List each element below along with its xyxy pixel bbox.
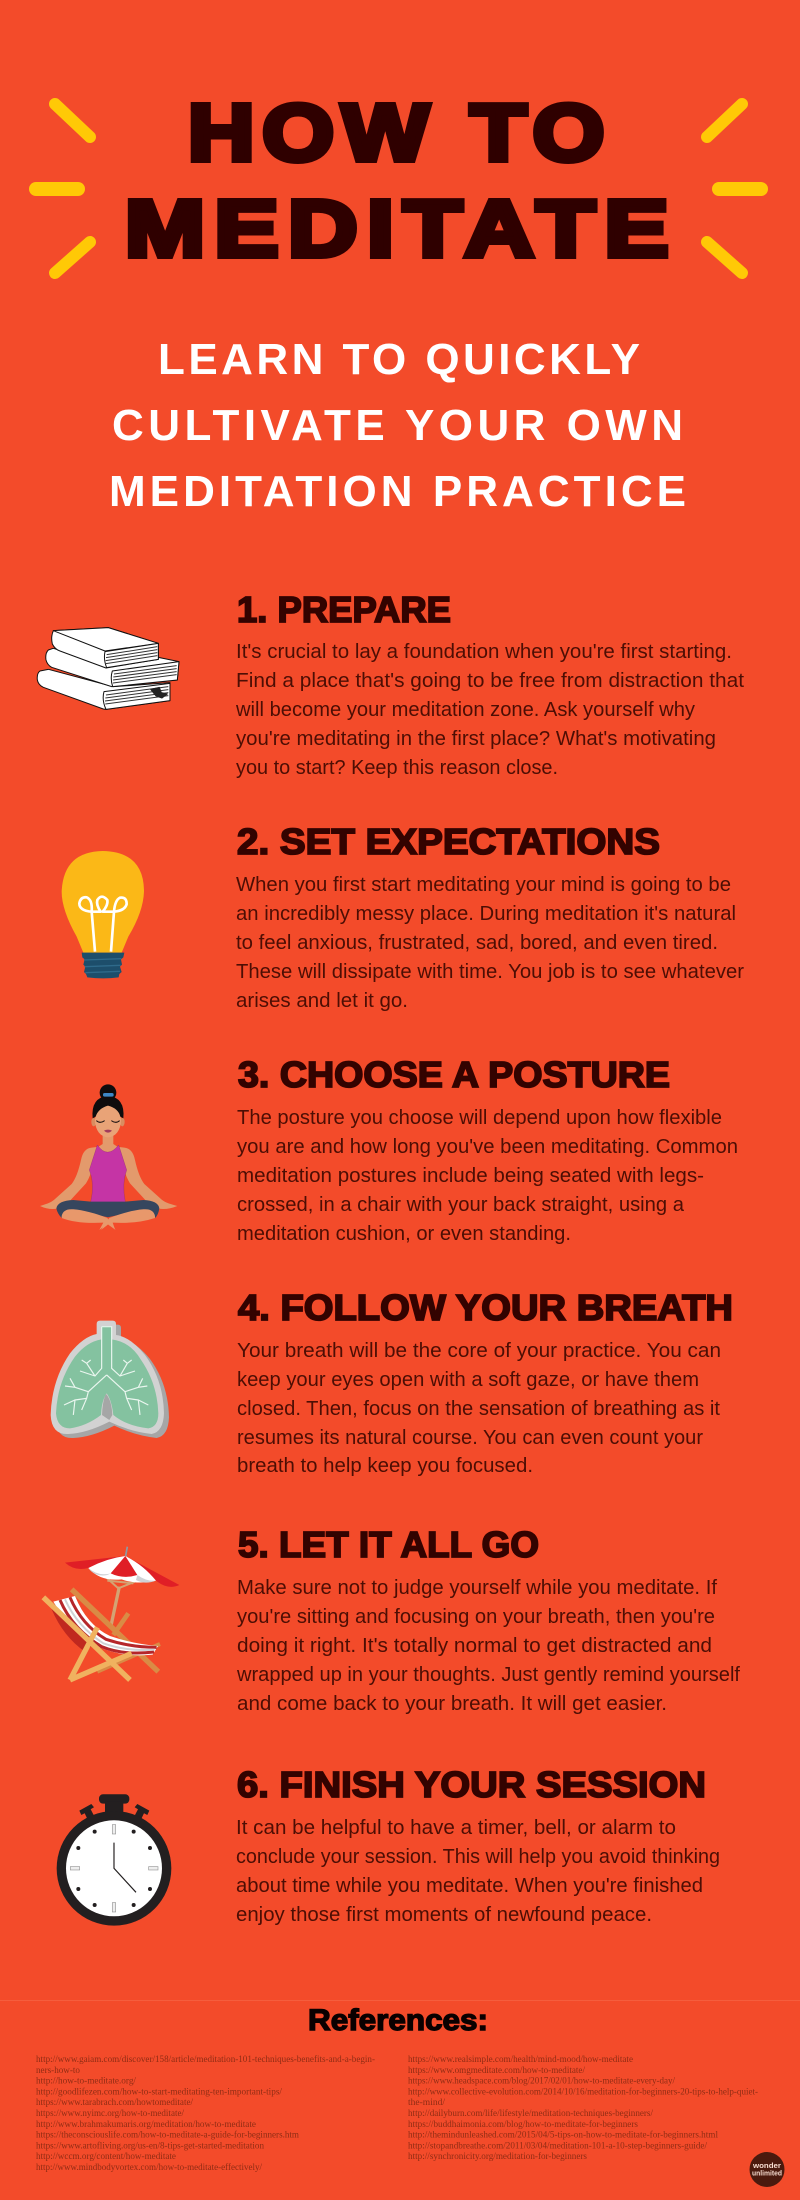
references: left column: https://www.artofliving.org/us-en/8-tips-get-started-meditation — [36, 2140, 264, 2150]
references: left column: http://how-to-meditate.org/ — [36, 2076, 137, 2086]
text block: you're sitting and focusing on your breath, then you're — [237, 1606, 715, 1628]
references: right column: https://www.realsimple.com/health/mind-mood/how-meditate — [408, 2054, 633, 2064]
text block: keep your eyes open with a soft gaze, or have them — [237, 1369, 699, 1391]
heading: 3. CHOOSE A POSTURE — [238, 1054, 670, 1095]
references: right column: http://synchronicity.org/meditation-for-beginners — [408, 2151, 587, 2161]
logo badge — [750, 2152, 784, 2187]
references: left column: http://goodlifezen.com/how-to-start-meditating-ten-important-tips/ — [36, 2086, 283, 2096]
references: left column: http://www.brahmakumaris.org/meditation/how-to-meditate — [36, 2119, 256, 2129]
references: right column: http://stopandbreathe.com/2011/03/04/meditation-101-a-10-step-beginners-guide/ — [408, 2140, 707, 2150]
references: right column: https://www.headspace.com/blog/2017/02/01/how-to-meditate-every-day/ — [408, 2076, 675, 2086]
references: right column: http://www.collective-evolution.com/2014/10/16/meditation-for-beginners-20-tips-to-help-quiet- — [408, 2086, 758, 2096]
subtitle: LEARN TO QUICKLY — [158, 335, 640, 384]
text block — [237, 1107, 738, 1245]
text block: crossed, in a chair with your back straight, using a — [237, 1194, 685, 1216]
heading: 6. FINISH YOUR SESSION — [237, 1764, 706, 1805]
text block: These will dissipate with time. You job is to see whatever — [236, 961, 744, 983]
references: left column: http://www.mindbodyvortex.com/how-to-meditate-effectively/ — [36, 2162, 262, 2172]
text block: meditation cushion, or even standing. — [237, 1223, 571, 1245]
text block: to feel anxious, frustrated, sad, bored, and even tired. — [236, 932, 718, 954]
icon: light bulb — [62, 851, 144, 978]
text block: you to start? Keep this reason close. — [236, 757, 558, 779]
text block — [235, 641, 744, 779]
icon: stack of books — [37, 628, 179, 709]
title — [125, 89, 669, 273]
references: left column: ners-how-to — [36, 2065, 80, 2075]
panel: step 1 prepare — [37, 589, 744, 779]
logo badge: unlimited — [752, 2170, 782, 2178]
subtitle: MEDITATION PRACTICE — [109, 467, 686, 516]
text block: meditation postures include being seated with legs- — [237, 1165, 704, 1187]
text block: enjoy those first moments of newfound peace. — [236, 1904, 652, 1926]
logo badge: wonder — [752, 2163, 781, 2170]
icon: lungs — [51, 1321, 169, 1438]
references: right column: http://dailyburn.com/life/lifestyle/meditation-techniques-beginners/ — [408, 2108, 653, 2118]
references: right column: the-mind/ — [408, 2097, 446, 2107]
panel: step 4 follow your breath — [51, 1287, 733, 1477]
text block: you're meditating in the first place? What's motivating — [236, 728, 716, 750]
text block: you are and how long you've been meditating. Common — [237, 1136, 738, 1158]
icon: meditating woman — [40, 1084, 177, 1230]
icon: stopwatch — [57, 1794, 171, 1926]
title: HOW TO — [188, 89, 604, 178]
text block: doing it right. It's totally normal to get distracted and — [237, 1635, 712, 1657]
references: left column: http://wccm.org/content/how-meditate — [36, 2151, 176, 2161]
references: right column: https://buddhaimonia.com/blog/how-to-meditate-for-beginners — [408, 2119, 638, 2129]
panel: step 5 let it all go — [43, 1524, 740, 1715]
text block: conclude your session. This will help you avoid thinking — [236, 1846, 720, 1868]
heading: 5. LET IT ALL GO — [238, 1524, 539, 1565]
references: right column: http://themindunleashed.com/2015/04/5-tips-on-how-to-meditate-for-beginners.html — [408, 2130, 718, 2140]
references: left column: https://www.tarabrach.com/howtomeditate/ — [36, 2097, 194, 2107]
text block: Make sure not to judge yourself while you meditate. If — [237, 1577, 717, 1599]
text block: arises and let it go. — [236, 990, 408, 1012]
references: left column: https://www.nyimc.org/how-to-meditate/ — [36, 2108, 184, 2118]
text block: and come back to your breath. It will get easier. — [237, 1693, 667, 1715]
icon: right sun rays — [707, 104, 761, 273]
text block: Your breath will be the core of your practice. You can — [237, 1340, 721, 1362]
text block: breath to help keep you focused. — [237, 1455, 533, 1477]
references: right column — [408, 2054, 758, 2161]
panel: step 3 choose a posture — [40, 1054, 738, 1245]
references: left column — [36, 2054, 375, 2172]
text block — [236, 1577, 740, 1715]
text block — [237, 1340, 721, 1477]
text block: The posture you choose will depend upon how flexible — [237, 1107, 722, 1129]
text block: When you first start meditating your mind is going to be — [236, 874, 731, 896]
text block: It can be helpful to have a timer, bell, or alarm to — [236, 1817, 676, 1839]
text block: closed. Then, focus on the sensation of breathing as it — [237, 1398, 720, 1420]
text block: an incredibly messy place. During meditation it's natural — [236, 903, 736, 925]
heading: 2. SET EXPECTATIONS — [237, 821, 660, 862]
text block: about time while you meditate. When you're finished — [236, 1875, 703, 1897]
references heading: References: — [308, 2004, 488, 2037]
text block — [236, 1817, 720, 1926]
title: MEDITATE — [125, 184, 669, 273]
heading: 1. PREPARE — [237, 589, 451, 630]
text block: wrapped up in your thoughts. Just gently remind yourself — [236, 1664, 740, 1686]
text block: Find a place that's going to be free from distraction that — [236, 670, 744, 692]
text block: It's crucial to lay a foundation when you're first starting. — [236, 641, 732, 663]
text block: resumes its natural course. You can even count your — [237, 1427, 703, 1449]
subtitle — [109, 335, 686, 516]
panel: step 6 finish your session — [57, 1764, 720, 1926]
references: left column: https://theconsciouslife.com/how-to-meditate-a-guide-for-beginners.htm — [36, 2130, 299, 2140]
panel: step 2 set expectations — [62, 821, 744, 1012]
icon: left sun rays — [36, 104, 90, 273]
heading: 4. FOLLOW YOUR BREATH — [238, 1287, 733, 1328]
text block: will become your meditation zone. Ask yourself why — [235, 699, 695, 721]
subtitle: CULTIVATE YOUR OWN — [112, 401, 683, 450]
text block — [236, 874, 744, 1012]
references: right column: https://www.omgmeditate.com/how-to-meditate/ — [408, 2065, 585, 2075]
references: left column: http://www.gaiam.com/discover/158/article/meditation-101-techniques-benefits-and-a-begin- — [36, 2054, 375, 2064]
icon: beach chair and umbrella — [43, 1547, 179, 1680]
